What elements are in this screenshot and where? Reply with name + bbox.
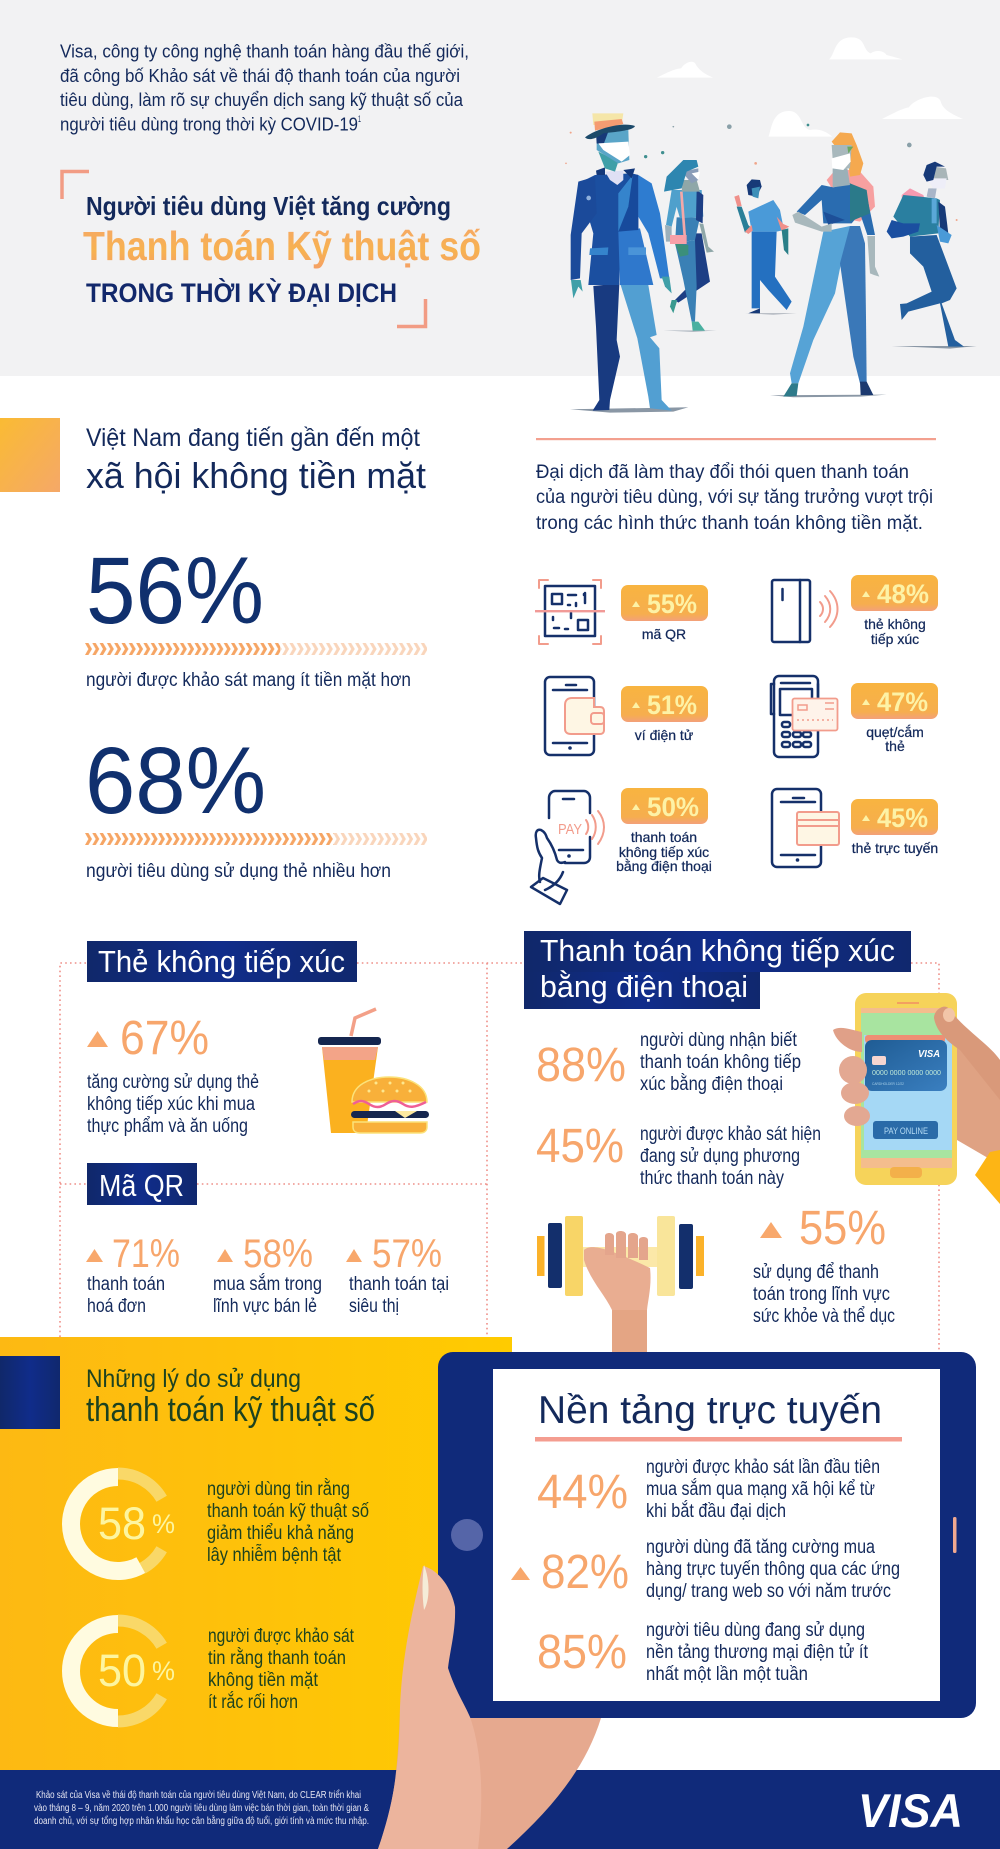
ring (71, 1620, 162, 1722)
payment method: online card (772, 789, 938, 867)
label (866, 724, 924, 754)
stat: 44 percent: 44% (537, 1466, 628, 1519)
stat: 85 percent: 85% (537, 1626, 627, 1679)
badge 55: 55% (647, 589, 697, 619)
intro text: Visa, công ty công nghệ thanh toán hàng đầu thế giới, (60, 40, 469, 62)
label: ví điện tử (635, 727, 693, 743)
label (616, 829, 712, 874)
stat: 82 percent: người dùng đã tăng cường mua (646, 1537, 875, 1558)
heading (524, 931, 911, 1009)
intro text: tiêu dùng, làm rõ sự chuyển dịch sang kỹ thuật số của (60, 89, 464, 110)
badge 48: 48% (877, 579, 929, 609)
label: không tiếp xúc (619, 844, 709, 860)
chevron progress bar (85, 643, 427, 655)
panel: contactless phone payment (524, 931, 1000, 1352)
confetti dots (565, 124, 958, 221)
intro text: người tiêu dùng trong thời kỳ COVID-19 (60, 114, 358, 134)
stat: 57 percent: thanh toán tại (349, 1274, 449, 1295)
title line 3: TRONG THỜI KỲ ĐẠI DỊCH (86, 277, 397, 308)
panel: reasons heading (0, 1356, 375, 1429)
payment method: e-wallet (545, 677, 708, 755)
stat: 45 percent: người được khảo sát hiện (640, 1124, 821, 1145)
description: người được khảo sát (208, 1626, 355, 1647)
stat: 55 percent: toán trong lĩnh vực (753, 1284, 890, 1305)
payment card: CARDHOLDER 12/22 (872, 1081, 905, 1086)
label: bằng điện thoại (616, 858, 712, 874)
big number: 68% (85, 728, 266, 834)
pay online button (873, 1121, 938, 1139)
caption: người được khảo sát mang ít tiền mặt hơn (86, 670, 411, 691)
badge 51: 51% (647, 690, 697, 720)
main title block (62, 172, 481, 326)
paragraph: pandemic changed habits: trong các hình thức thanh toán không tiền mặt. (536, 513, 923, 534)
value: 58 (98, 1498, 146, 1549)
value: % (152, 1509, 175, 1539)
stat: 82 percent: dụng/ trang web so với năm trước (646, 1581, 891, 1602)
icon: phone with card (772, 789, 839, 867)
badge 55 (621, 585, 708, 621)
description (208, 1626, 355, 1713)
label: thẻ không (864, 616, 926, 632)
stat: 68 percent (85, 728, 427, 882)
payment card: VISA (918, 1049, 940, 1060)
heading rule (535, 1437, 902, 1442)
icon: QR code (535, 580, 605, 644)
rule above paragraph (536, 438, 936, 440)
title line 2: Thanh toán Kỹ thuật số (83, 223, 481, 269)
icon: drink and burger (318, 1009, 429, 1133)
stat: 88 percent: thanh toán không tiếp (640, 1052, 801, 1073)
footer band (0, 1770, 1000, 1849)
donut: 58 percent (71, 1474, 369, 1571)
person: running man (887, 162, 977, 349)
heading: Thẻ không tiếp xúc (98, 944, 345, 979)
stat: 67 percent (87, 1012, 209, 1065)
icon: hand with phone and PAY: PAY (558, 821, 582, 838)
person: woman with bag (663, 160, 717, 332)
payment method: contactless phone pay (531, 788, 712, 904)
hand palm behind tablet (378, 1690, 601, 1849)
badge 50 (621, 788, 708, 824)
section heading: cashless society (0, 418, 426, 496)
badge 47 (851, 683, 938, 719)
ring (71, 1474, 162, 1571)
value: % (152, 1656, 175, 1686)
stat: 88 percent: xúc bằng điện thoại (640, 1073, 783, 1095)
phone body (855, 993, 957, 1185)
badge 48 (851, 575, 938, 611)
stat: 82 percent (511, 1537, 900, 1602)
stat: 45 percent: đang sử dụng phương (640, 1146, 800, 1167)
header background (0, 0, 1000, 376)
stat: 56 percent (85, 538, 427, 691)
description: tăng cường sử dụng thẻ (87, 1072, 259, 1093)
icon: card with waves (772, 580, 838, 642)
title line 1: Người tiêu dùng Việt tăng cường (86, 191, 451, 221)
subheading: QR: Mã QR (99, 1168, 184, 1203)
panel: yellow reasons background (0, 1337, 512, 1770)
navy square marker (0, 1356, 60, 1429)
payment method: card swipe (771, 676, 938, 757)
icon: dumbbell with hand (537, 1216, 704, 1352)
stat: 58 percent: 58% (243, 1232, 313, 1276)
stat: 45 percent (536, 1120, 821, 1189)
description: người dùng tin rằng (207, 1478, 350, 1500)
stat: 71 percent: hoá đơn (87, 1296, 146, 1317)
badge 45 (851, 799, 938, 835)
stat: 57 percent (346, 1232, 449, 1317)
chevron progress bar (85, 833, 427, 845)
label: thanh toán (631, 829, 697, 845)
payment card: 0000 0000 0000 0000 (872, 1068, 941, 1077)
badge 45: 45% (877, 803, 928, 833)
stat: 57 percent: siêu thị (349, 1296, 399, 1317)
payment card (865, 1040, 947, 1091)
donut: 50 percent (71, 1620, 355, 1722)
stat: 71 percent: thanh toán (87, 1274, 165, 1295)
clouds (657, 37, 963, 137)
stat: 58 percent: mua sắm trong (213, 1273, 322, 1295)
pay online button: PAY ONLINE (884, 1126, 928, 1137)
stat: 45 percent: thức thanh toán này (640, 1168, 784, 1189)
stat: 85 percent: nhất một lần một tuần (646, 1664, 808, 1685)
description: thực phẩm và ăn uống (87, 1116, 248, 1137)
stat: 71 percent (86, 1232, 180, 1317)
person: small man (734, 179, 797, 315)
heading: bằng điện thoại (540, 969, 748, 1004)
stat: 44 percent: mua sắm qua mạng xã hội kể từ (646, 1478, 875, 1500)
description: ít rắc rối hơn (208, 1691, 298, 1713)
paragraph: pandemic changed habits: Đại dịch đã làm thay đổi thói quen thanh toán (536, 462, 909, 483)
title bracket bottom-right (397, 299, 426, 326)
stat: 85 percent: nền tảng thương mại điện tử ít (646, 1642, 869, 1663)
footer note: Khảo sát của Visa về thái độ thanh toán của người tiêu dùng Việt Nam, do CLEAR triển khai (36, 1789, 361, 1801)
stat: 44 percent (537, 1457, 880, 1522)
Visa logo: VISA (858, 1784, 963, 1837)
fingers and thumb (833, 1007, 1000, 1126)
heading text: Những lý do sử dụng (86, 1365, 301, 1393)
description: tin rằng thanh toán (208, 1647, 346, 1669)
intro text (60, 40, 469, 134)
label (864, 616, 926, 647)
orange square marker (0, 418, 60, 492)
tablet home button (451, 1519, 483, 1551)
title bracket top-left (62, 172, 89, 199)
stat: 55 percent (753, 1202, 895, 1327)
heading: Thanh toán không tiếp xúc (540, 933, 895, 968)
tablet body (438, 1352, 976, 1718)
footer note (34, 1789, 369, 1827)
stat: 85 percent: người tiêu dùng đang sử dụng (646, 1620, 865, 1641)
heading: Nền tảng trực tuyến (538, 1389, 882, 1432)
description (87, 1072, 259, 1137)
label: mã QR (642, 626, 686, 642)
stat: 44 percent: khi bắt đầu đại dịch (646, 1500, 786, 1522)
value: 50 (98, 1645, 146, 1696)
payment method: QR (535, 580, 708, 644)
icon: hand with phone and PAY (531, 791, 604, 904)
stat: 55 percent: sức khỏe và thể dục (753, 1306, 895, 1327)
value (98, 1498, 175, 1549)
payment method: contactless card (772, 575, 938, 647)
section heading: cashless society: xã hội không tiền mặt (86, 455, 426, 496)
icon: POS terminal with card (771, 676, 838, 757)
person: man in hat (570, 113, 688, 413)
stat: 55 percent: sử dụng để thanh (753, 1262, 879, 1283)
paragraph: pandemic changed habits (536, 462, 933, 534)
tablet screen (493, 1369, 940, 1701)
stat: 44 percent: người được khảo sát lần đầu tiên (646, 1457, 880, 1478)
big number: 56% (86, 538, 264, 644)
dotted frames (60, 963, 939, 1352)
stat: 88 percent: người dùng nhận biết (640, 1030, 798, 1051)
hand palm (940, 1010, 1000, 1165)
heading text: Việt Nam đang tiến gần đến một (86, 424, 420, 452)
stat: 55 percent: 55% (799, 1202, 886, 1255)
stat: 58 percent (213, 1232, 322, 1317)
label: thẻ trực tuyến (852, 840, 938, 856)
stat: 71 percent: 71% (112, 1232, 180, 1276)
illustration: hand holding phone (833, 993, 1000, 1204)
value (98, 1645, 175, 1696)
description: thanh toán kỹ thuật số (207, 1501, 369, 1522)
stat: 82 percent: 82% (541, 1546, 629, 1599)
hand thumb in front of tablet (378, 1565, 481, 1849)
stat: 85 percent (537, 1620, 869, 1685)
stat: 88 percent: 88% (536, 1039, 626, 1092)
label: thẻ (885, 738, 905, 754)
panel: reasons heading: thanh toán kỹ thuật số (86, 1391, 375, 1429)
description: không tiền mặt (208, 1670, 319, 1691)
description: giảm thiểu khả năng (207, 1523, 354, 1544)
label: tiếp xúc (871, 631, 919, 647)
stat: 58 percent: lĩnh vực bán lẻ (213, 1296, 317, 1317)
badge 47: 47% (877, 687, 928, 717)
stat: 88 percent (536, 1030, 801, 1095)
panel: tablet online platforms (438, 1352, 976, 1718)
tablet side pill (953, 1517, 956, 1553)
intro text: đã công bố Khảo sát về thái độ thanh toán của người (60, 65, 460, 86)
footer note: doanh chủ, với sự tổng hợp nhân khẩu học cân bằng giữa độ tuổi, giới tính và mức thu nhập. (34, 1814, 369, 1827)
illustration: people with masks (565, 37, 977, 413)
footer note: vào tháng 8 – 9, năm 2020 trên 1.000 người tiêu dùng làm việc bán thời gian, toàn thời gian & (34, 1803, 369, 1814)
paragraph: pandemic changed habits: của người tiêu dùng, với sự tăng trưởng vượt trội (536, 487, 933, 508)
caption: người tiêu dùng sử dụng thẻ nhiều hơn (86, 861, 391, 882)
badge 51 (621, 686, 708, 722)
label: quẹt/cắm (866, 724, 924, 740)
description (207, 1478, 369, 1566)
stat: 45 percent: 45% (536, 1120, 624, 1173)
stat: 57 percent: 57% (372, 1232, 442, 1276)
panel: contactless card (86, 941, 449, 1317)
person: woman orange hair (770, 132, 887, 397)
description: lây nhiễm bệnh tật (207, 1544, 342, 1566)
thumb nail (422, 1565, 428, 1610)
stat: 82 percent: hàng trực tuyến thông qua các ứng (646, 1559, 900, 1580)
stat: 67 percent: 67% (120, 1012, 209, 1065)
sleeve cuff (975, 1150, 1000, 1204)
intro text: 1 (358, 114, 361, 124)
description: không tiếp xúc khi mua (87, 1094, 255, 1115)
icon: phone with wallet (545, 677, 604, 755)
badge 50: 50% (647, 792, 699, 822)
